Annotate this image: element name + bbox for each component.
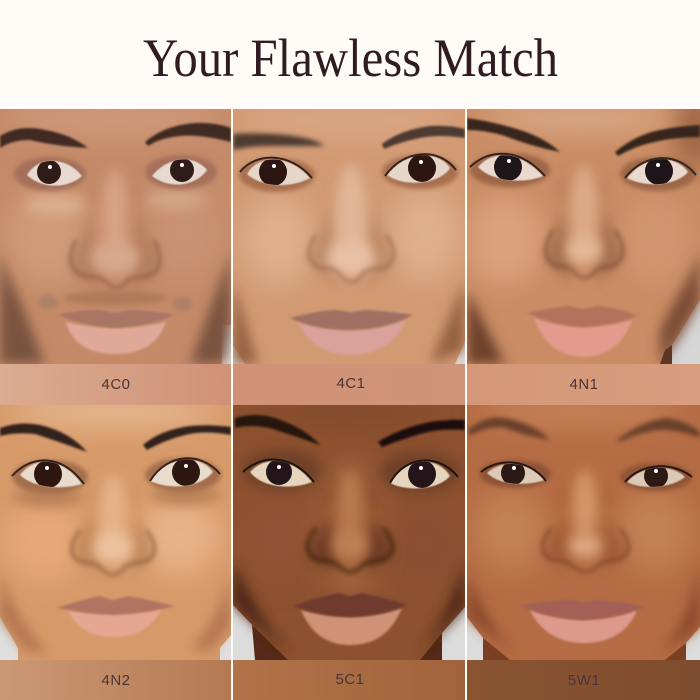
left eyebrow [235, 415, 320, 445]
left eyebrow [0, 424, 87, 452]
lips [290, 310, 413, 355]
swatch: 4N1: 4N1 [569, 376, 599, 393]
panel: shade 4C0 portrait [0, 100, 231, 364]
left eyebrow [0, 128, 88, 148]
swatch: 4N1 [467, 364, 700, 405]
left eye [470, 153, 550, 187]
panel: shade 4C1 portrait [233, 106, 465, 364]
left eyebrow [233, 133, 325, 150]
swatch: 4N2 [0, 660, 231, 700]
lips [57, 596, 175, 637]
swatch: 5C1 [233, 660, 465, 700]
swatch: 4C1 [233, 364, 465, 405]
left eye [479, 460, 551, 488]
swatch: 4C0 [0, 364, 231, 405]
swatch: 5W1: 5W1 [568, 672, 600, 689]
nose [71, 475, 155, 575]
left eye [243, 459, 314, 487]
nose [71, 170, 160, 290]
left eye [14, 157, 86, 191]
swatch: 5W1 [467, 660, 700, 700]
nose [542, 470, 629, 572]
right eye [382, 154, 458, 189]
lips [293, 593, 408, 645]
right eyebrow [615, 125, 700, 156]
right eyebrow [145, 123, 231, 146]
swatch: 4C0: 4C0 [101, 376, 131, 393]
right eyebrow [617, 418, 700, 442]
right eye [145, 155, 217, 189]
panel: shade 5W1 portrait [467, 400, 700, 660]
left eyebrow [467, 118, 560, 152]
lips [58, 310, 174, 354]
swatch: 5C1: 5C1 [335, 671, 365, 688]
right eye [390, 460, 458, 488]
title: Your Flawless Match [143, 28, 558, 88]
swatch: 4C1: 4C1 [336, 375, 366, 392]
swatch: 4N2: 4N2 [101, 672, 131, 689]
nose [309, 165, 394, 285]
left eye [12, 460, 88, 494]
right eyebrow [378, 420, 465, 447]
panel: shade 4N2 portrait [0, 398, 231, 660]
right eye [145, 458, 221, 492]
right eyebrow [143, 425, 231, 450]
panel: shade 5C1 portrait [233, 400, 465, 660]
panel: shade 4N1 portrait [465, 90, 700, 364]
lips [520, 600, 645, 643]
lips [527, 306, 637, 357]
right eye [620, 157, 696, 191]
left eyebrow [468, 418, 550, 440]
left eye [239, 158, 315, 192]
right eyebrow [382, 126, 465, 149]
nose [546, 165, 623, 280]
right eye [620, 463, 692, 491]
nose [307, 470, 393, 572]
